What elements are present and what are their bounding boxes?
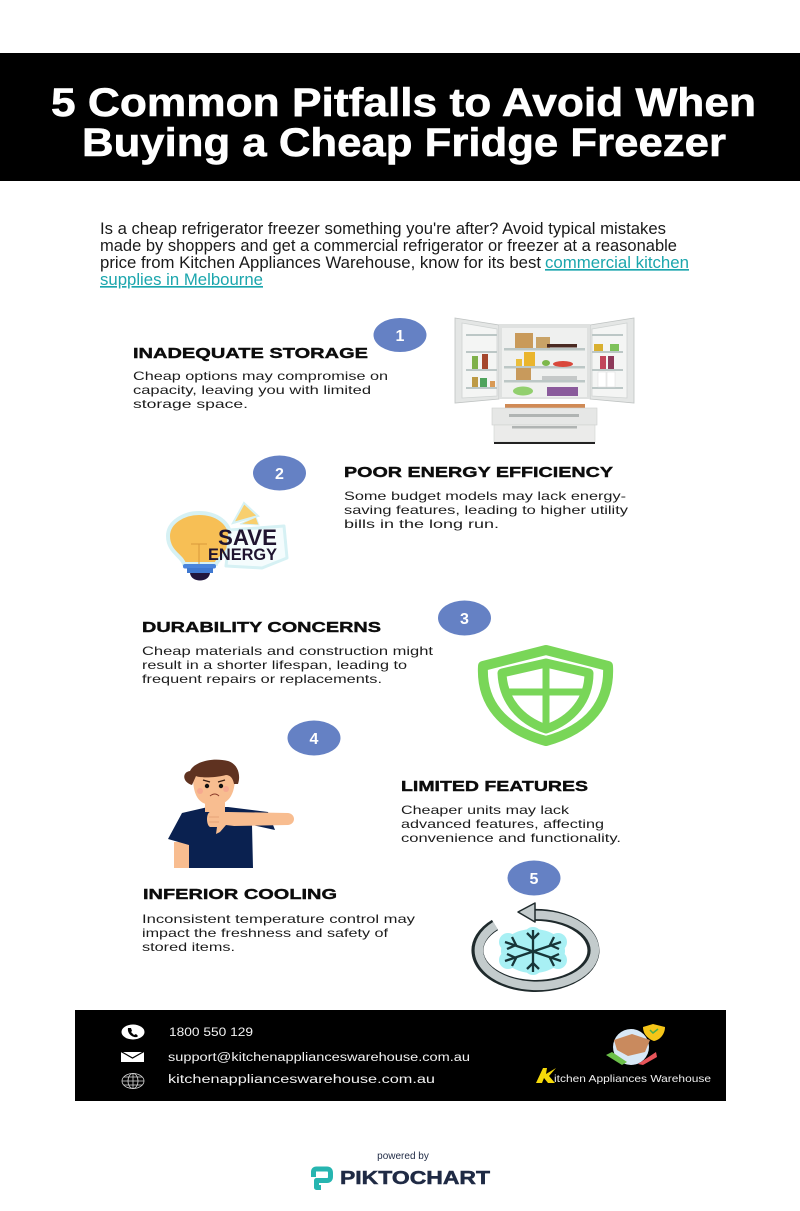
text 2: Some budget models may lack energy-	[344, 489, 626, 503]
icon: piktochart logo	[314, 1169, 330, 1188]
title banner	[0, 53, 800, 181]
text 2: bills in the long run.	[344, 517, 499, 531]
text 4	[401, 803, 621, 845]
intro paragraph: made by shoppers and get a commercial refrigerator or freezer at a reasonable	[100, 237, 677, 255]
section 3: durability concerns	[142, 600, 608, 741]
icon: snowflake with cycle arrow	[477, 903, 595, 986]
badge 1	[374, 318, 426, 352]
text 5: impact the freshness and safety of	[142, 926, 389, 940]
phone number: 1800 550 129	[169, 1027, 253, 1039]
badge 3: 3	[460, 611, 469, 628]
website address: kitchenapplianceswarehouse.com.au	[168, 1074, 435, 1086]
text 1: capacity, leaving you with limited	[133, 383, 371, 397]
powered by piktochart: powered by	[377, 1151, 429, 1162]
text 4: advanced features, affecting	[401, 817, 604, 831]
text 1	[133, 369, 388, 411]
footer contact bar	[75, 1010, 726, 1101]
intro paragraph	[100, 220, 689, 289]
intro paragraph: Is a cheap refrigerator freezer something you're after? Avoid typical mistakes	[100, 220, 666, 238]
powered by piktochart	[314, 1151, 490, 1188]
badge 2	[253, 456, 306, 490]
title banner: 5 Common Pitfalls to Avoid When	[51, 81, 756, 125]
text 1: Cheap options may compromise on	[133, 369, 388, 383]
text 5	[142, 912, 415, 954]
icon: save energy bulb: ENERGY	[208, 545, 278, 564]
company logo: itchen Appliances Warehouse	[554, 1073, 711, 1085]
text 5: Inconsistent temperature control may	[142, 912, 415, 926]
heading 1: INADEQUATE STORAGE	[133, 345, 368, 362]
heading 2: POOR ENERGY EFFICIENCY	[344, 464, 613, 481]
icon: open fridge	[455, 318, 634, 444]
badge 2: 2	[275, 466, 284, 483]
section 4: limited features	[168, 720, 621, 868]
text 4: convenience and functionality.	[401, 831, 621, 845]
text 3	[142, 644, 434, 686]
text 3: frequent repairs or replacements.	[142, 672, 382, 686]
intro paragraph: supplies in Melbourne	[100, 271, 263, 289]
section 1: inadequate storage	[133, 318, 634, 444]
email address: support@kitchenapplianceswarehouse.com.au	[168, 1052, 470, 1064]
powered by piktochart: PIKTOCHART	[340, 1168, 490, 1188]
badge 1: 1	[396, 328, 405, 345]
icon: envelope	[121, 1052, 144, 1062]
section 5: inferior cooling	[142, 860, 595, 986]
icon: save energy bulb: SAVE	[218, 525, 277, 550]
heading 3: DURABILITY CONCERNS	[142, 619, 381, 636]
icon: man with thumb down	[168, 760, 294, 868]
icon: green shield	[483, 650, 608, 741]
text 2: saving features, leading to higher utility	[344, 503, 628, 517]
text 4: Cheaper units may lack	[401, 803, 570, 817]
badge 5	[508, 860, 560, 896]
text 1: storage space.	[133, 397, 248, 411]
heading 5: INFERIOR COOLING	[143, 886, 337, 903]
company logo	[536, 1024, 711, 1085]
section 2: poor energy efficiency	[168, 456, 628, 580]
icon: phone	[122, 1024, 144, 1040]
text 5: stored items.	[142, 940, 235, 954]
text 3: result in a shorter lifespan, leading to	[142, 658, 407, 672]
badge 5: 5	[530, 871, 539, 888]
icon: save energy bulb	[168, 503, 287, 580]
intro paragraph: price from Kitchen Appliances Warehouse, know for its best	[100, 254, 541, 272]
title banner: Buying a Cheap Fridge Freezer	[82, 121, 726, 165]
intro paragraph: commercial kitchen	[545, 254, 689, 272]
text 2	[344, 489, 628, 531]
badge 4: 4	[310, 731, 319, 748]
icon: globe	[122, 1074, 144, 1088]
badge 4	[288, 720, 340, 756]
heading 4: LIMITED FEATURES	[401, 778, 588, 795]
text 3: Cheap materials and construction might	[142, 644, 434, 658]
badge 3	[438, 600, 491, 636]
